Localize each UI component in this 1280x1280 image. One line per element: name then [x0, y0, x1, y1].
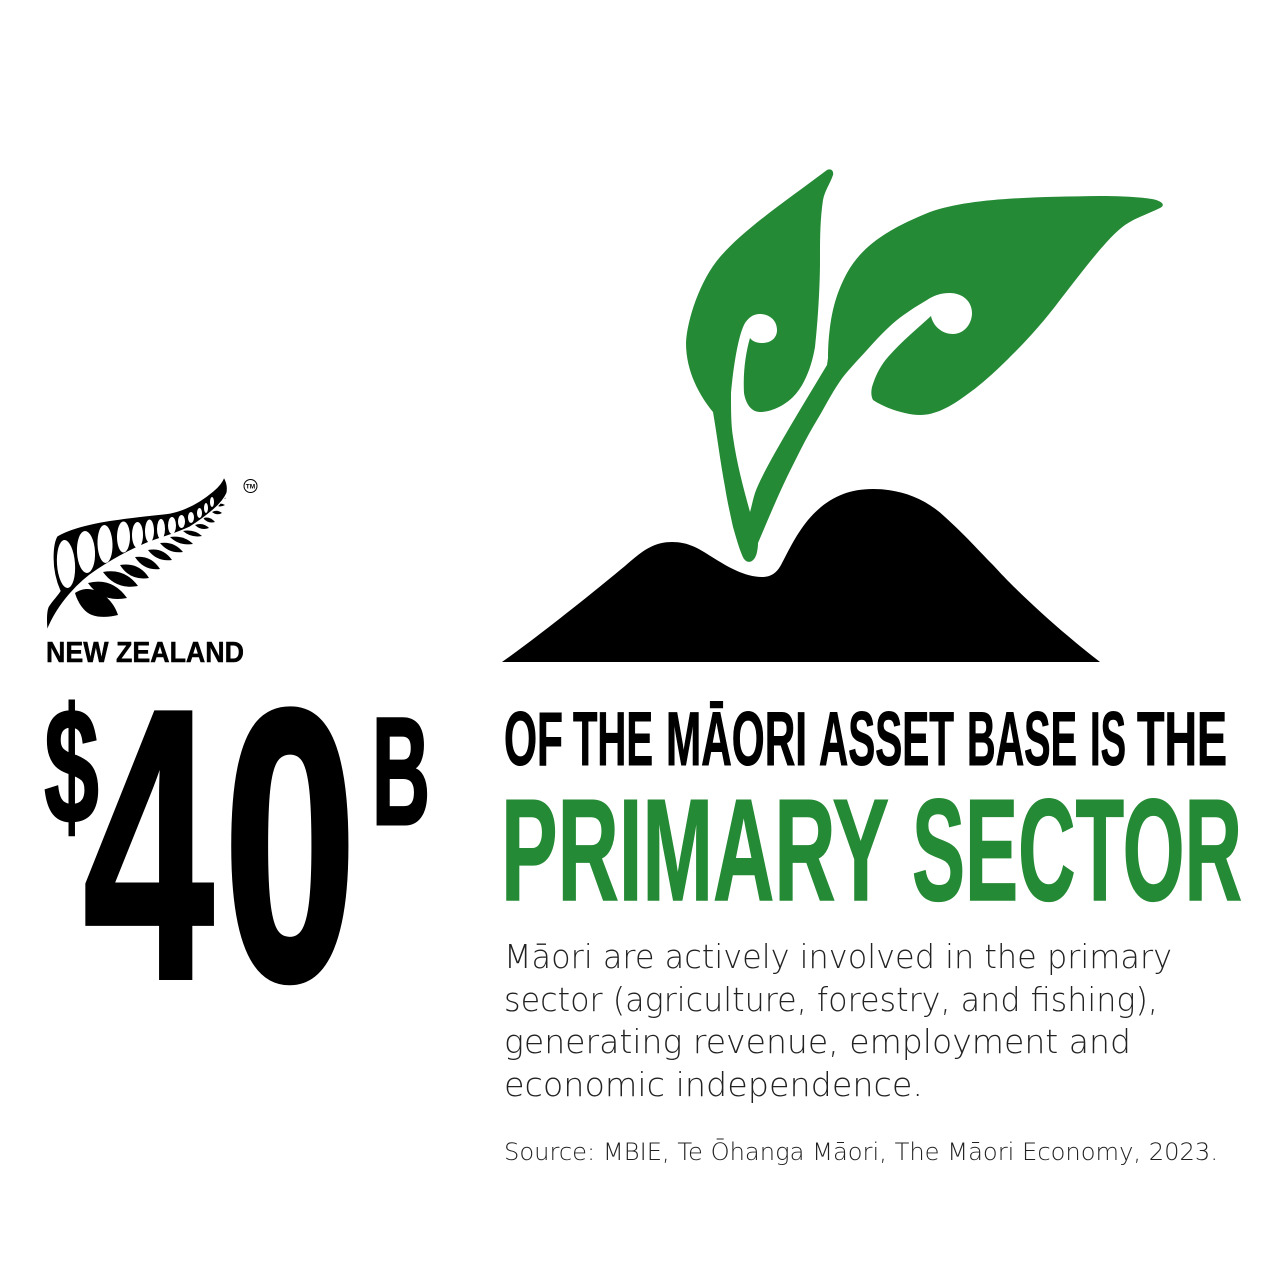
trademark symbol: TM	[246, 484, 255, 490]
heading line 1: BASE	[967, 697, 1077, 782]
heading line 1: THE	[573, 697, 653, 782]
fern upper band and stem	[46, 477, 227, 631]
body paragraph: Māori are actively involved in the primary	[504, 937, 1172, 976]
fern white oval fronds	[55, 497, 214, 589]
body paragraph	[504, 937, 1172, 1104]
big number: $40B: 0	[224, 631, 356, 1060]
logo wordmark: NEW ZEALAND	[46, 637, 244, 669]
trademark symbol	[244, 480, 257, 492]
big number: $40B: B	[372, 686, 430, 857]
heading line 1: OF	[504, 697, 563, 782]
heading line 1: MĀORI	[666, 697, 807, 782]
source line: Source: MBIE, Te Ōhanga Māori, The Māori Economy, 2023.	[504, 1137, 1218, 1166]
logo: New Zealand fern mark	[46, 477, 257, 669]
big number: $40B: 4	[83, 629, 215, 1060]
heading line 2: primary sector: PRIMARY	[501, 769, 889, 931]
body paragraph: sector (agriculture, forestry, and fishing),	[504, 980, 1158, 1019]
heading line 1: IS	[1090, 697, 1126, 782]
big number: $40B: $	[44, 674, 99, 858]
heading line 1	[504, 697, 1227, 782]
body paragraph: economic independence.	[504, 1065, 923, 1104]
big number: $40B	[44, 629, 430, 1060]
icon: sprouting green leaves	[686, 169, 1163, 562]
icon: silver fern	[46, 477, 227, 631]
icon: black hills	[502, 489, 1100, 662]
fern lower leaflets	[75, 497, 226, 617]
body paragraph: generating revenue, employment and	[504, 1022, 1131, 1061]
heading line 1: ASSET	[819, 697, 954, 782]
